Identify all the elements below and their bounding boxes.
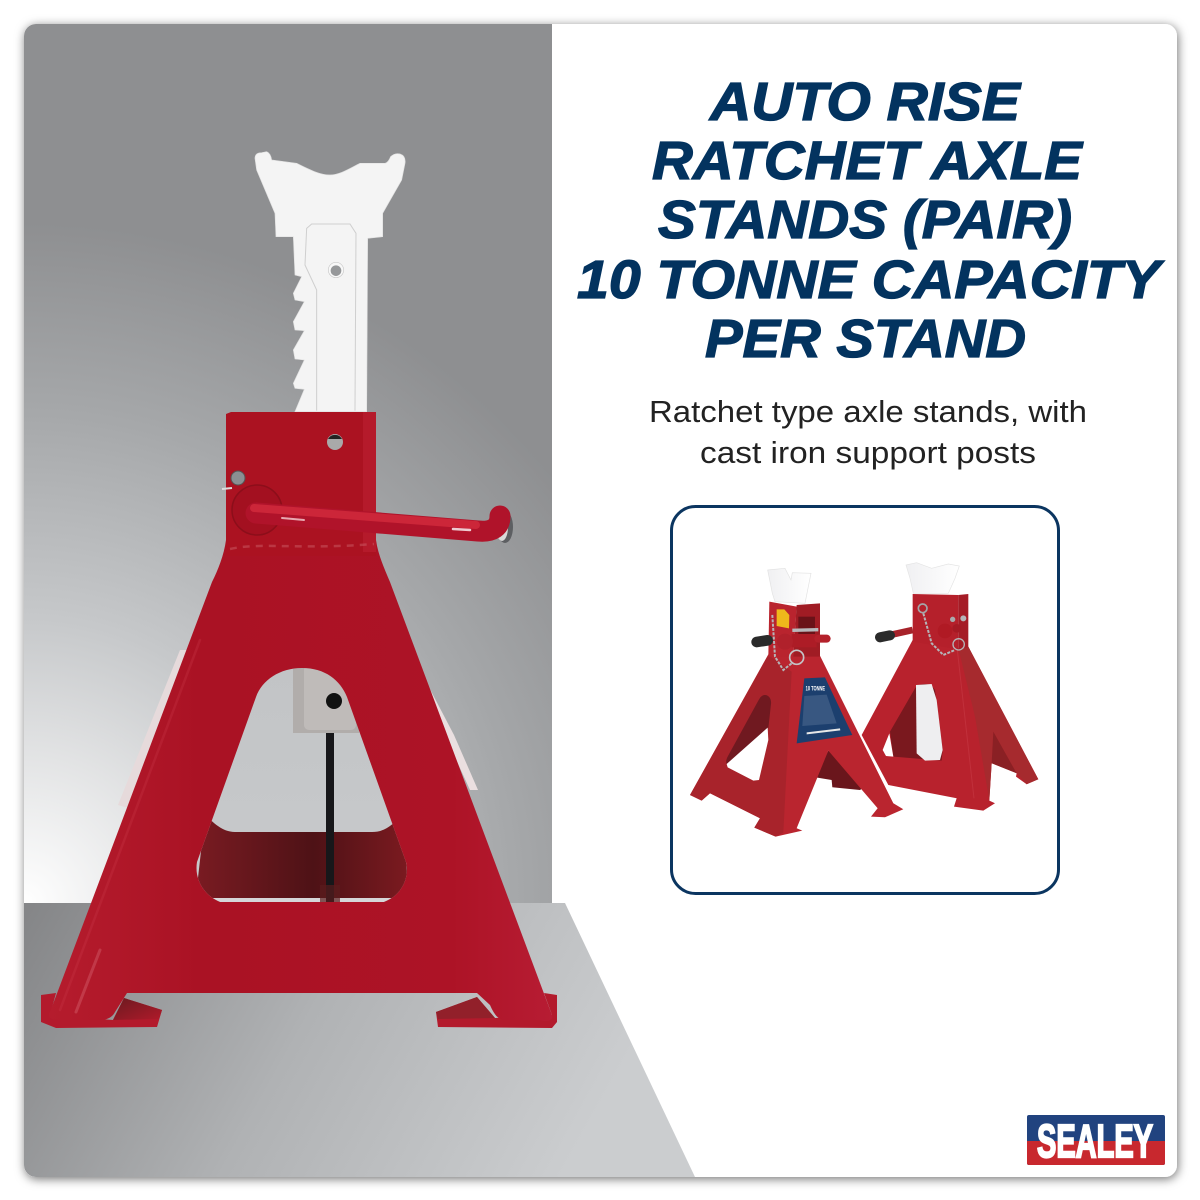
A frame	[49, 540, 552, 1021]
description text: Ratchet type axle stands, with	[649, 394, 1087, 429]
rear stand chain	[923, 613, 955, 655]
rear stand	[862, 563, 1038, 811]
front stand collar	[768, 602, 797, 657]
rear stand collar	[913, 594, 958, 649]
window interior	[196, 668, 407, 902]
front stand saddle	[768, 568, 811, 603]
dark arch and rear foot	[815, 751, 870, 790]
panel: product photo	[24, 24, 695, 1177]
title: RATCHET AXLE	[652, 131, 1084, 191]
large axle stand	[41, 152, 557, 1028]
weld	[230, 544, 374, 549]
front stand body	[690, 654, 903, 837]
title: STANDS (PAIR)	[658, 190, 1072, 250]
front stand chain	[772, 615, 792, 670]
title: PER STAND	[705, 309, 1026, 369]
feet	[41, 993, 557, 1028]
collar hole	[327, 434, 343, 450]
label: 10 TONNE	[806, 687, 825, 693]
warning sign	[777, 609, 789, 628]
side window	[726, 695, 771, 764]
collar	[222, 412, 376, 556]
title: 10 TONNE CAPACITY	[577, 250, 1165, 310]
edge highlights	[60, 640, 200, 1012]
title	[577, 72, 1165, 369]
front stand	[690, 568, 903, 837]
inset panel: pair of stands	[672, 506, 1058, 894]
rear stand side leg	[958, 647, 1038, 801]
description text: cast iron support posts	[700, 435, 1036, 470]
front stand handle	[757, 630, 827, 650]
ratchet post	[255, 152, 405, 412]
floor	[24, 903, 695, 1177]
bolt	[231, 471, 245, 485]
base plate	[198, 821, 407, 902]
rear stand window	[890, 684, 943, 761]
rear stand handle	[890, 630, 913, 635]
title: AUTO RISE	[708, 72, 1022, 132]
far side slivers	[118, 650, 478, 808]
inner post	[293, 665, 359, 733]
rear stand body	[862, 640, 1038, 811]
description text	[649, 394, 1087, 470]
rod	[326, 733, 334, 903]
rear stand saddle	[906, 563, 959, 593]
front stand side face	[690, 655, 792, 837]
handle	[232, 485, 513, 543]
label	[797, 677, 852, 743]
wall backdrop	[24, 24, 552, 903]
rear stand post	[916, 684, 943, 761]
